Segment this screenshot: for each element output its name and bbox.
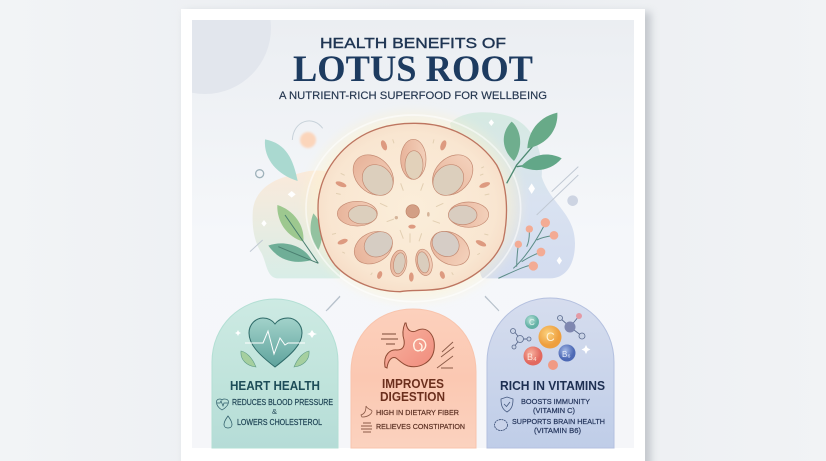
- heading line 2: DIGESTION: [380, 390, 445, 404]
- ampersand: &: [272, 407, 277, 416]
- hole: top: [401, 139, 426, 179]
- benefit text: HIGH IN DIETARY FIBER: [376, 408, 459, 417]
- heading: RICH IN VITAMINS: [500, 379, 605, 393]
- icon: vitamin molecules: B₄: [527, 352, 537, 362]
- hole: left: [337, 201, 377, 226]
- benefit text: (VITAMIN C): [533, 406, 575, 415]
- icon: stomach: [381, 323, 454, 368]
- heading: health benefits of: HEALTH BENEFITS OF: [320, 35, 506, 52]
- panel: rich in vitamins: [487, 298, 614, 448]
- icon: small heart: [216, 399, 228, 410]
- heading: lotus root: LOTUS ROOT: [293, 49, 533, 90]
- hole: bottom left: [388, 249, 409, 278]
- card shape: [351, 309, 476, 448]
- heading: IMPROVES: [382, 377, 444, 391]
- icon: shield: [501, 397, 513, 412]
- hole: bottom right: [413, 248, 435, 277]
- small pores: [335, 139, 491, 282]
- icon: small stomach: [361, 406, 372, 417]
- halo ring: [306, 115, 521, 302]
- benefit text: BOOSTS IMMUNITY: [521, 397, 590, 406]
- panel: improves digestion: [351, 309, 476, 448]
- slice outline: [318, 123, 507, 292]
- connector lines: [326, 296, 499, 311]
- sparkles: [261, 119, 562, 265]
- benefit text: RELIEVES CONSTIPATION: [376, 422, 465, 431]
- icon: vitamin molecules: C: [529, 318, 535, 327]
- centre hole: [406, 205, 419, 218]
- icon: brain: [494, 420, 508, 430]
- hole: upper left: [345, 147, 402, 203]
- card shape: [487, 298, 614, 448]
- benefit text: LOWERS CHOLESTEROL: [237, 418, 323, 427]
- icon: vitamin molecules: B₆: [562, 350, 571, 359]
- hole: lower left: [349, 225, 398, 270]
- panel: heart health: [212, 299, 338, 448]
- backdrop blobs: [253, 105, 575, 308]
- title block: [279, 35, 547, 102]
- icon: water drop: [224, 416, 232, 428]
- coral sprig: [498, 218, 558, 278]
- teal leaf: [265, 139, 298, 181]
- right leaves: [504, 113, 562, 183]
- left leaves: [268, 205, 322, 263]
- hole: upper right: [424, 147, 481, 203]
- hole: right: [448, 202, 489, 227]
- heading: HEART HEALTH: [230, 379, 320, 393]
- radial fibre marks: [332, 139, 489, 275]
- inner panel: [192, 20, 634, 448]
- decorative rings and dots: [250, 121, 578, 310]
- benefit text: (VITAMIN B6): [534, 426, 581, 435]
- illustration: lotus root with botanical backdrop: [250, 105, 578, 310]
- icon: intestines: [361, 423, 372, 432]
- benefit text: REDUCES BLOOD PRESSURE: [232, 398, 333, 407]
- card shape: [212, 299, 338, 448]
- benefit text: SUPPORTS BRAIN HEALTH: [512, 417, 605, 426]
- subtitle: A NUTRIENT-RICH SUPERFOOD FOR WELLBEING: [279, 90, 547, 102]
- white card: [181, 9, 651, 461]
- icon: vitamin molecules: [510, 313, 590, 370]
- icon: vitamin molecules: C: [546, 330, 555, 344]
- hole: lower right: [424, 224, 476, 272]
- icon: heart with pulse: [235, 318, 317, 367]
- lotus root slice: [318, 123, 507, 292]
